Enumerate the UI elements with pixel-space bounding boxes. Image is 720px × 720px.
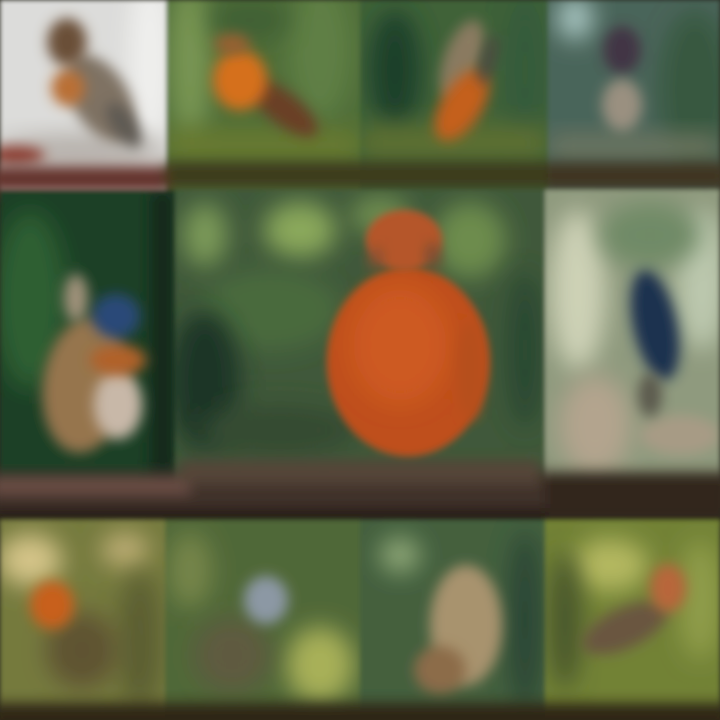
- branch: bottom edge: [0, 703, 720, 720]
- panel: bottom-right bird: [545, 520, 720, 720]
- branch: top: [0, 162, 720, 192]
- panel: bottom-left bird: [0, 520, 165, 720]
- panel: top-centre-right bird: [360, 0, 548, 190]
- panel: middle-left bird: [0, 190, 175, 490]
- panel: middle-centre background: [170, 190, 545, 490]
- panel: middle-right bird: [545, 190, 720, 490]
- bird: central orange bird: [327, 210, 489, 456]
- panel: bottom-centre-left bird: [165, 520, 360, 720]
- panel: top-centre-left orange bird: [166, 0, 360, 190]
- panel: top-left bird: [0, 0, 170, 190]
- panel: top-right bird: [548, 0, 720, 190]
- branch: middle: [0, 460, 720, 524]
- panel: bottom-centre-right bird: [360, 520, 545, 720]
